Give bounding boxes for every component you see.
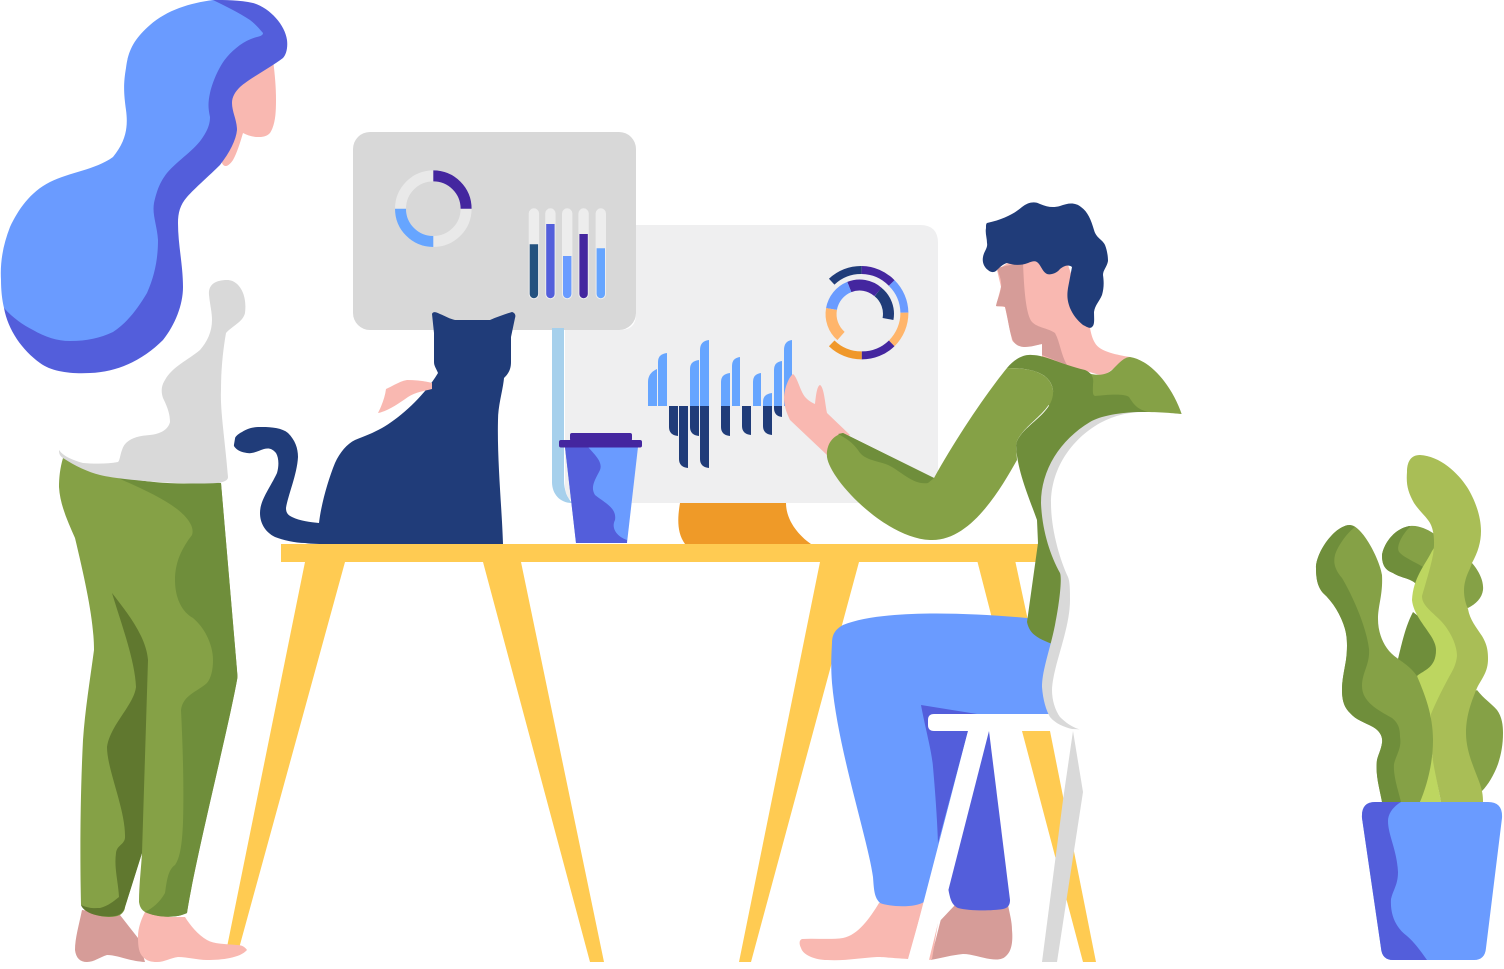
man back foot [930,905,1012,960]
man front leg [831,614,1060,906]
chair seat [928,714,1060,731]
chart: monitor diverging bars [648,340,792,468]
woman trousers dark fold [81,593,148,917]
plant [1316,455,1503,960]
plant back leaf right [1450,690,1503,791]
panel: gray dashboard [353,132,636,330]
man sleeve shadow [838,433,934,483]
man shirt arm [827,368,1053,540]
man back leg shade [921,705,977,843]
plant tall leaf [1407,455,1488,802]
monitor stand arm [552,328,572,503]
woman hand [378,380,432,413]
woman sweater [59,165,385,483]
chart: gray panel donut [400,176,466,242]
man shirt torso [1040,357,1182,450]
plant bright leaf [1412,548,1460,802]
man front foot [800,902,924,960]
man head and neck [996,255,1130,376]
panel: main monitor [565,225,938,503]
man hand [784,374,850,455]
chair back shadow [1041,412,1143,732]
woman back foot [75,910,145,962]
man back leg [948,731,1010,910]
man [784,202,1182,960]
woman trousers shadow [118,478,237,917]
woman trousers [59,458,237,917]
plant dark back stem [1398,612,1445,678]
woman hair main [1,0,263,341]
man face shadow [996,262,1067,365]
man back foot skin sliver [929,923,938,960]
woman sweater gray shade [59,280,245,484]
coffee cup [559,433,642,543]
cat [233,312,515,544]
woman front foot [138,912,247,962]
chart: gray panel vertical bars [529,208,606,299]
desk [226,544,1096,962]
plant left leaf [1316,525,1433,802]
chair back [1051,412,1258,732]
plant back leaf shadow [1382,526,1432,585]
chair [908,412,1258,962]
chair front white leg [908,731,989,962]
chair gray leg [1042,731,1083,962]
plant back leaf upper [1382,526,1483,608]
man hair [983,202,1108,328]
monitor orange base [678,503,811,544]
woman face [222,60,276,166]
chart: monitor ring chart [831,270,904,355]
woman hair dark layer [4,0,287,373]
woman [1,0,432,962]
plant pot [1362,802,1502,960]
